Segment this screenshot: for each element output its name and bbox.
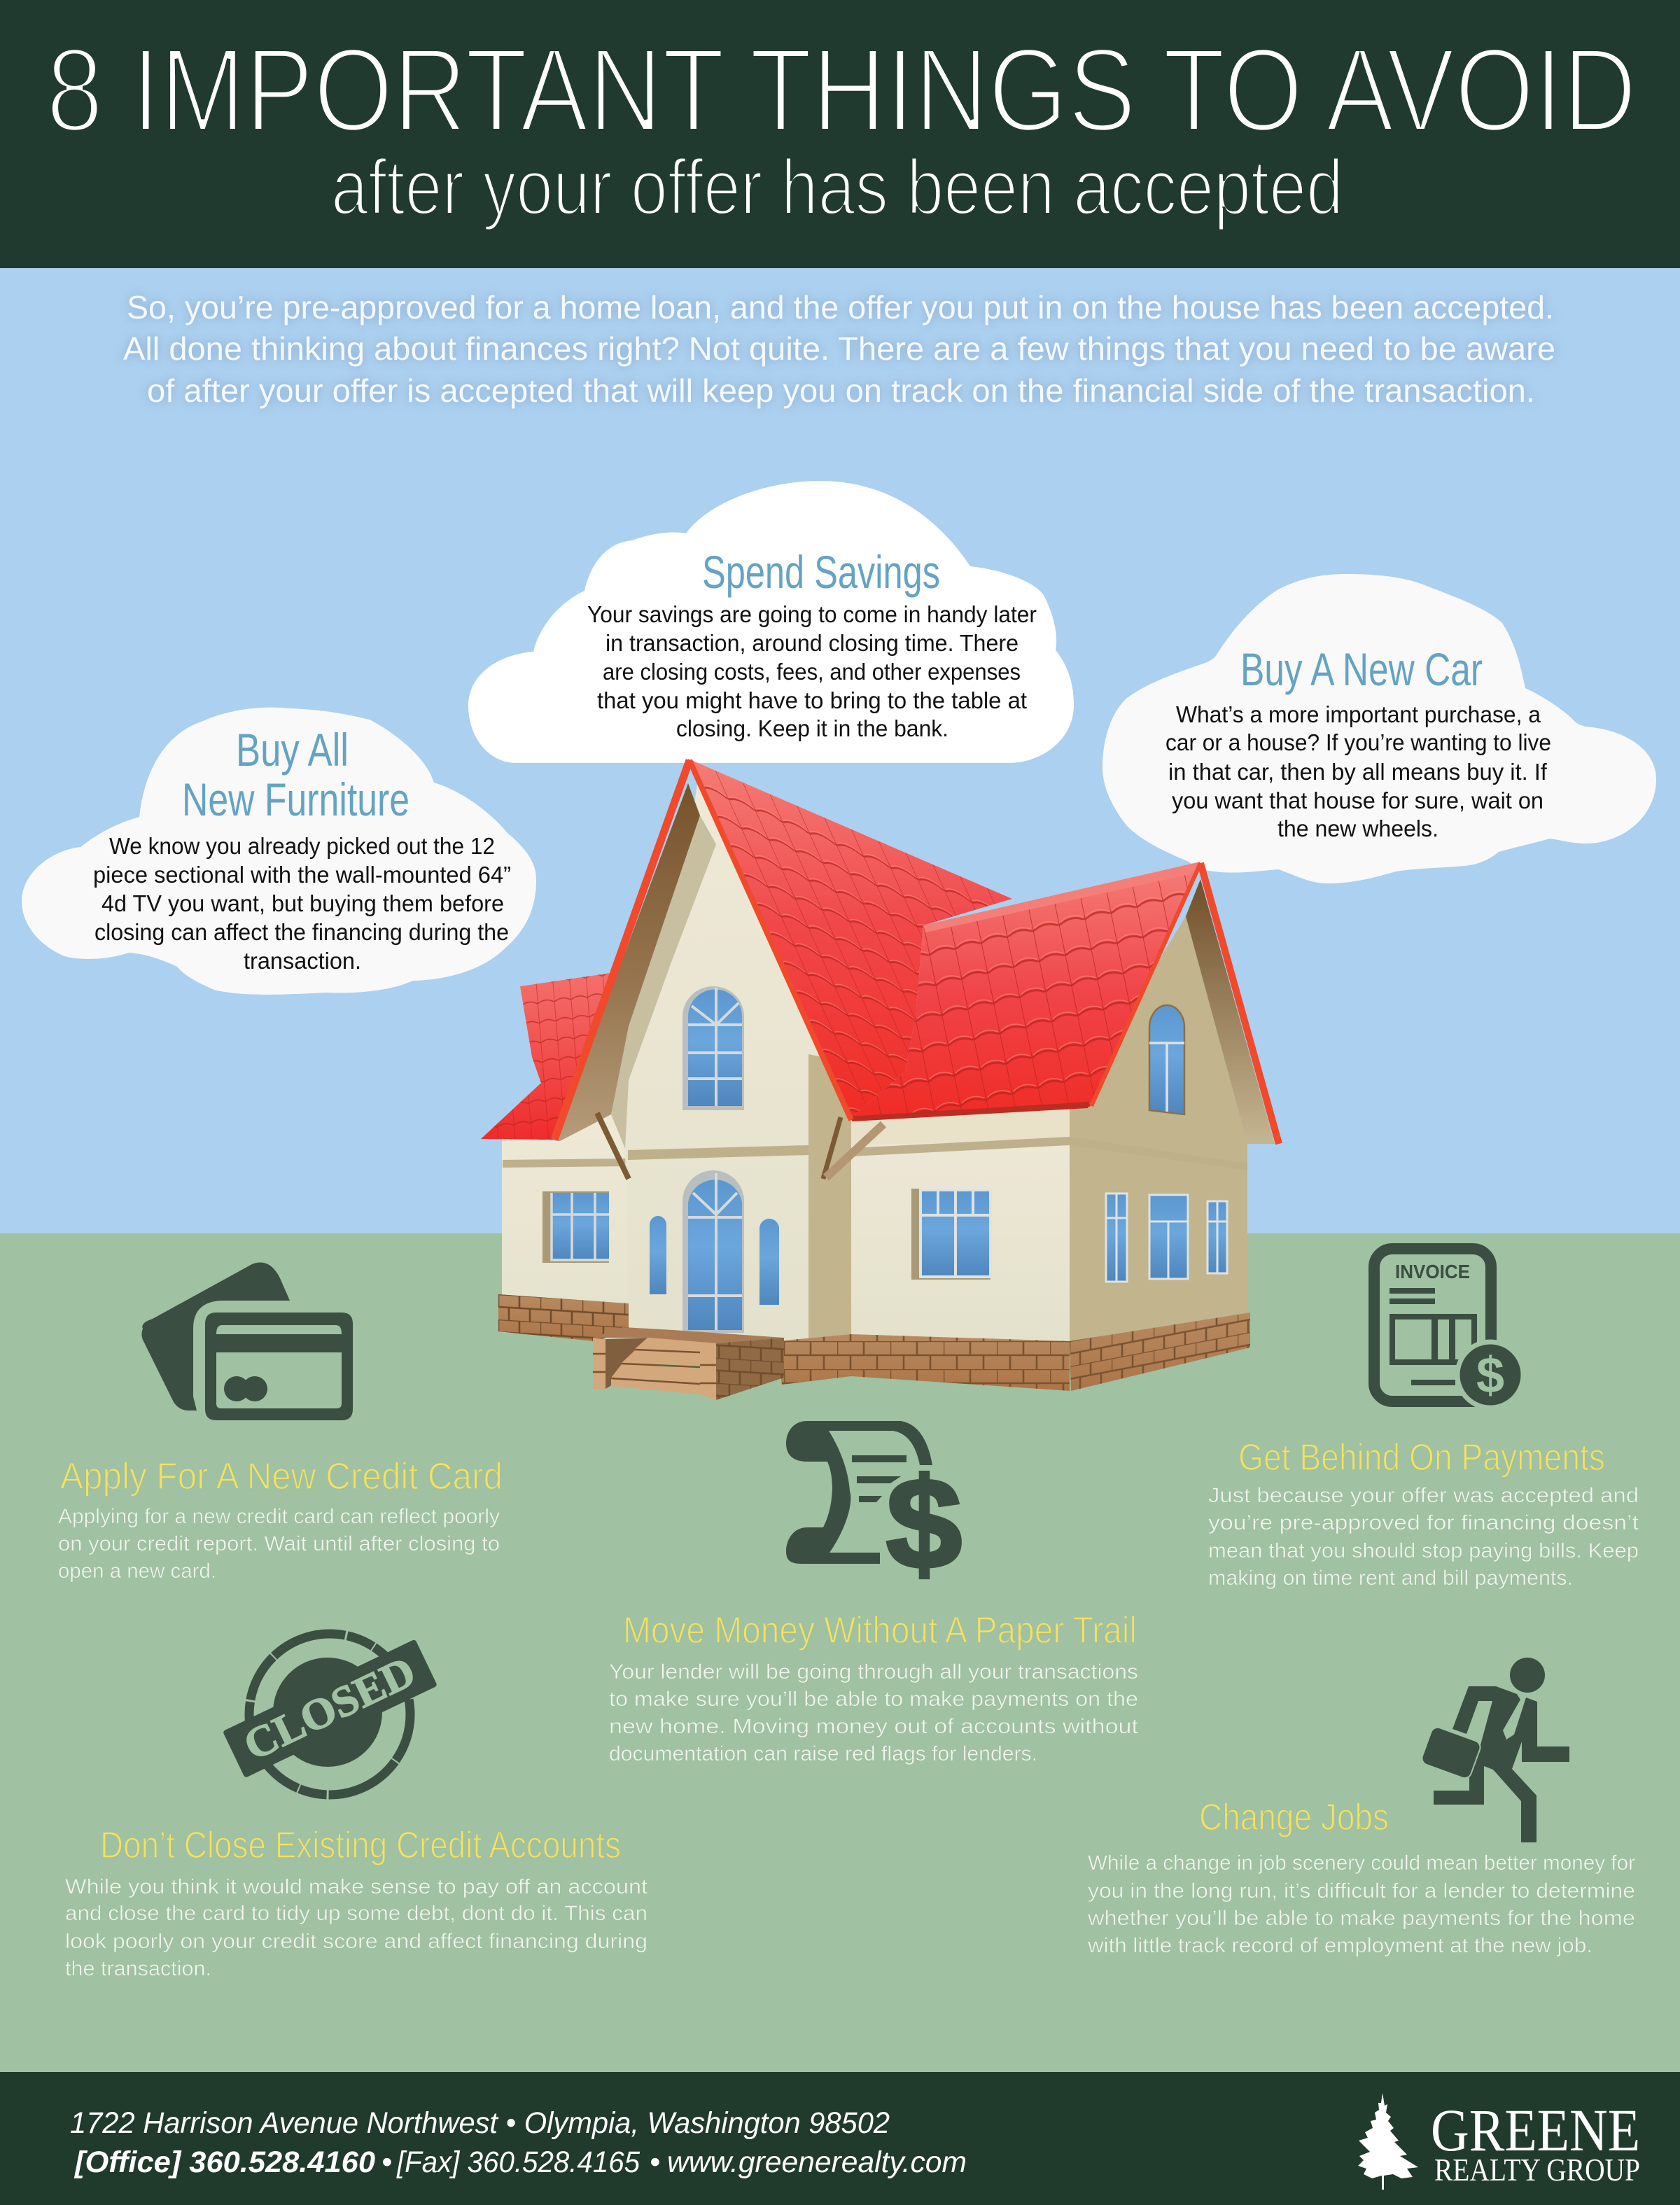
text block: Change Jobs: Change Jobs [1199,1796,1389,1838]
text block: Move Money Without A Paper Trail: to make sure you’ll be able to make payments on the [609,1688,1138,1711]
text block: Change Jobs [1087,1796,1635,1957]
footer contact: • [382,2146,392,2179]
text block: Apply For A New Credit Card: Apply For A New Credit Card [60,1455,503,1497]
text block: Get Behind On Payments: Get Behind On Payments [1238,1436,1605,1478]
icon: invoice [1374,1249,1523,1408]
text block: Change Jobs: whether you’ll be able to make payments for the home [1087,1907,1635,1930]
logo: wordmark: REALTY GROUP [1434,2152,1640,2188]
footer contact: [Office] 360.528.4160 [74,2146,375,2179]
cloud body text: in that car, then by all means buy it. If [1168,759,1548,785]
heading: Buy All New Furniture [182,724,410,825]
text block: Apply For A New Credit Card: open a new card. [58,1560,216,1583]
panel: cloud Spend Savings [468,481,1074,763]
window: right front [911,1189,990,1280]
footer contact: [Fax] 360.528.4165 [396,2146,640,2179]
window: left wing [542,1191,609,1263]
subtitle: after your offer has been accepted [331,144,1343,231]
intro text block: All done thinking about finances right? Not quite. There are a few things that you need to be aware [123,330,1555,367]
footer address: 1722 Harrison Avenue Northwest • Olympia, Washington 98502 [70,2106,890,2140]
text block: Change Jobs: with little track record of employment at the new job. [1087,1934,1592,1957]
cloud body text: piece sectional with the wall-mounted 64” [93,862,511,888]
illustration: house [481,759,1279,1400]
cloud body text: What’s a more important purchase, a [1176,701,1541,727]
narrow arched windows [650,1216,779,1305]
text block: Don't Close Existing Credit Accounts: the transaction. [65,1957,211,1980]
front gable underside [555,783,700,1141]
text block: Change Jobs: While a change in job scenery could mean better money for [1088,1851,1635,1875]
icon: closed stamp [223,1634,438,1795]
text block: Move Money Without A Paper Trail [609,1609,1139,1765]
cloud body text: that you might have to bring to the table at [597,687,1027,713]
cloud body text: closing can affect the financing during the [94,919,509,945]
panel: cloud Buy A New Car [1102,574,1656,883]
entry steps [593,1327,784,1400]
text block: Apply For A New Credit Card: on your credit report. Wait until after closing to [58,1532,500,1555]
cloud body text [1166,701,1551,841]
cloud body text: transaction. [244,948,361,974]
text block: Don't Close Existing Credit Accounts [65,1824,648,1980]
text block: Apply For A New Credit Card: Applying for a new credit card can reflect poorly [58,1505,500,1528]
heading: Spend Savings: Spend Savings [702,546,940,598]
left wing wall [502,1110,630,1341]
text block: Move Money Without A Paper Trail: documentation can raise red flags for lenders. [609,1742,1037,1765]
heading: Buy A New Car: Buy A New Car [1240,643,1483,695]
brick foundation [498,1294,1250,1391]
window: upper arched [682,986,744,1110]
icon: invoice: INVOICE [1395,1261,1470,1282]
text block: Don't Close Existing Credit Accounts: While you think it would make sense to pay off an account [65,1875,648,1898]
braces [597,1113,883,1179]
cloud body text: in transaction, around closing time. There [606,630,1018,656]
cloud body text: car or a house? If you’re wanting to live [1166,729,1551,755]
panel: header [0,0,1680,268]
text block: Get Behind On Payments: making on time rent and bill payments. [1208,1567,1573,1590]
footer contact: • [650,2146,660,2179]
right gable underside [1186,879,1275,1144]
panel: sky background [0,266,1680,1234]
text block: Apply For A New Credit Card [58,1455,503,1583]
door: arched [682,1170,744,1333]
intro text block: So, you’re pre-approved for a home loan, and the offer you put in on the house has been accepted. [127,289,1554,326]
logo: wordmark: GREENE [1431,2096,1640,2164]
cloud body text [587,601,1037,741]
text block: Get Behind On Payments: mean that you should stop paying bills. Keep [1208,1539,1639,1562]
icon: running businessman [1420,1658,1569,1842]
right side wall [1070,916,1247,1341]
right roof [848,862,1200,1121]
cloud body text: We know you already picked out the 12 [109,833,495,859]
heading: Buy All New Furniture: New Furniture [182,774,410,825]
text block: Get Behind On Payments [1208,1436,1639,1590]
icon: invoice: $ [1476,1348,1504,1404]
icon: credit cards [141,1263,353,1420]
side windows [1106,1194,1227,1282]
logo: wordmark [1431,2096,1640,2188]
window: gable side [1149,1005,1184,1114]
cloud body text: closing. Keep it in the bank. [676,715,948,741]
cloud body text: 4d TV you want, but buying them before [102,890,504,916]
front gable shaded edge [611,816,716,1149]
text block: Don't Close Existing Credit Accounts: look poorly on your credit score and affect financing during [65,1930,648,1953]
panel: ground background [0,1233,1680,2073]
wall bands [628,1137,1247,1170]
panel: cloud Buy All New Furniture [22,708,536,995]
footer contact: www.greenerealty.com [667,2146,967,2179]
intro text block: of after your offer is accepted that will keep you on track on the financial side of the transaction. [147,372,1535,409]
text block: Get Behind On Payments: Just because your offer was accepted and [1208,1484,1639,1507]
cloud body text: are closing costs, fees, and other expenses [603,659,1021,685]
icon: closed stamp: CLOSED [237,1648,423,1770]
intro text block [123,289,1555,409]
text block: Don't Close Existing Credit Accounts: Don’t Close Existing Credit Accounts [100,1824,621,1866]
text block: Change Jobs: you in the long run, it’s difficult for a lender to determine [1088,1879,1635,1903]
icon: paper scroll with dollar sign [786,1421,962,1595]
right front wall [851,1107,1070,1341]
roof fascia [554,760,1279,1144]
text block: Move Money Without A Paper Trail: Your lender will be going through all your transactions [609,1660,1138,1684]
cloud body text: the new wheels. [1278,816,1438,841]
main roof [688,759,1012,1120]
cloud body text: Your savings are going to come in handy later [587,601,1037,627]
footer contact [74,2146,967,2179]
text block: Get Behind On Payments: you’re pre-approved for financing doesn’t [1208,1511,1639,1534]
text block: Move Money Without A Paper Trail: Move Money Without A Paper Trail [623,1609,1137,1651]
cloud body text: you want that house for sure, wait on [1172,788,1544,813]
icon: paper scroll with dollar sign: $ [886,1451,962,1595]
heading: Buy All New Furniture: Buy All [236,724,349,776]
recess wall [808,1054,851,1341]
cloud body text [93,833,511,974]
front gable wall [625,766,822,1341]
panel: footer [0,2072,1680,2205]
logo: tree [1358,2093,1418,2190]
text block: Move Money Without A Paper Trail: new home. Moving money out of accounts without [609,1715,1139,1738]
left wing roof [481,973,611,1140]
text block: Don't Close Existing Credit Accounts: and close the card to tidy up some debt, dont do it. This can [65,1902,648,1925]
